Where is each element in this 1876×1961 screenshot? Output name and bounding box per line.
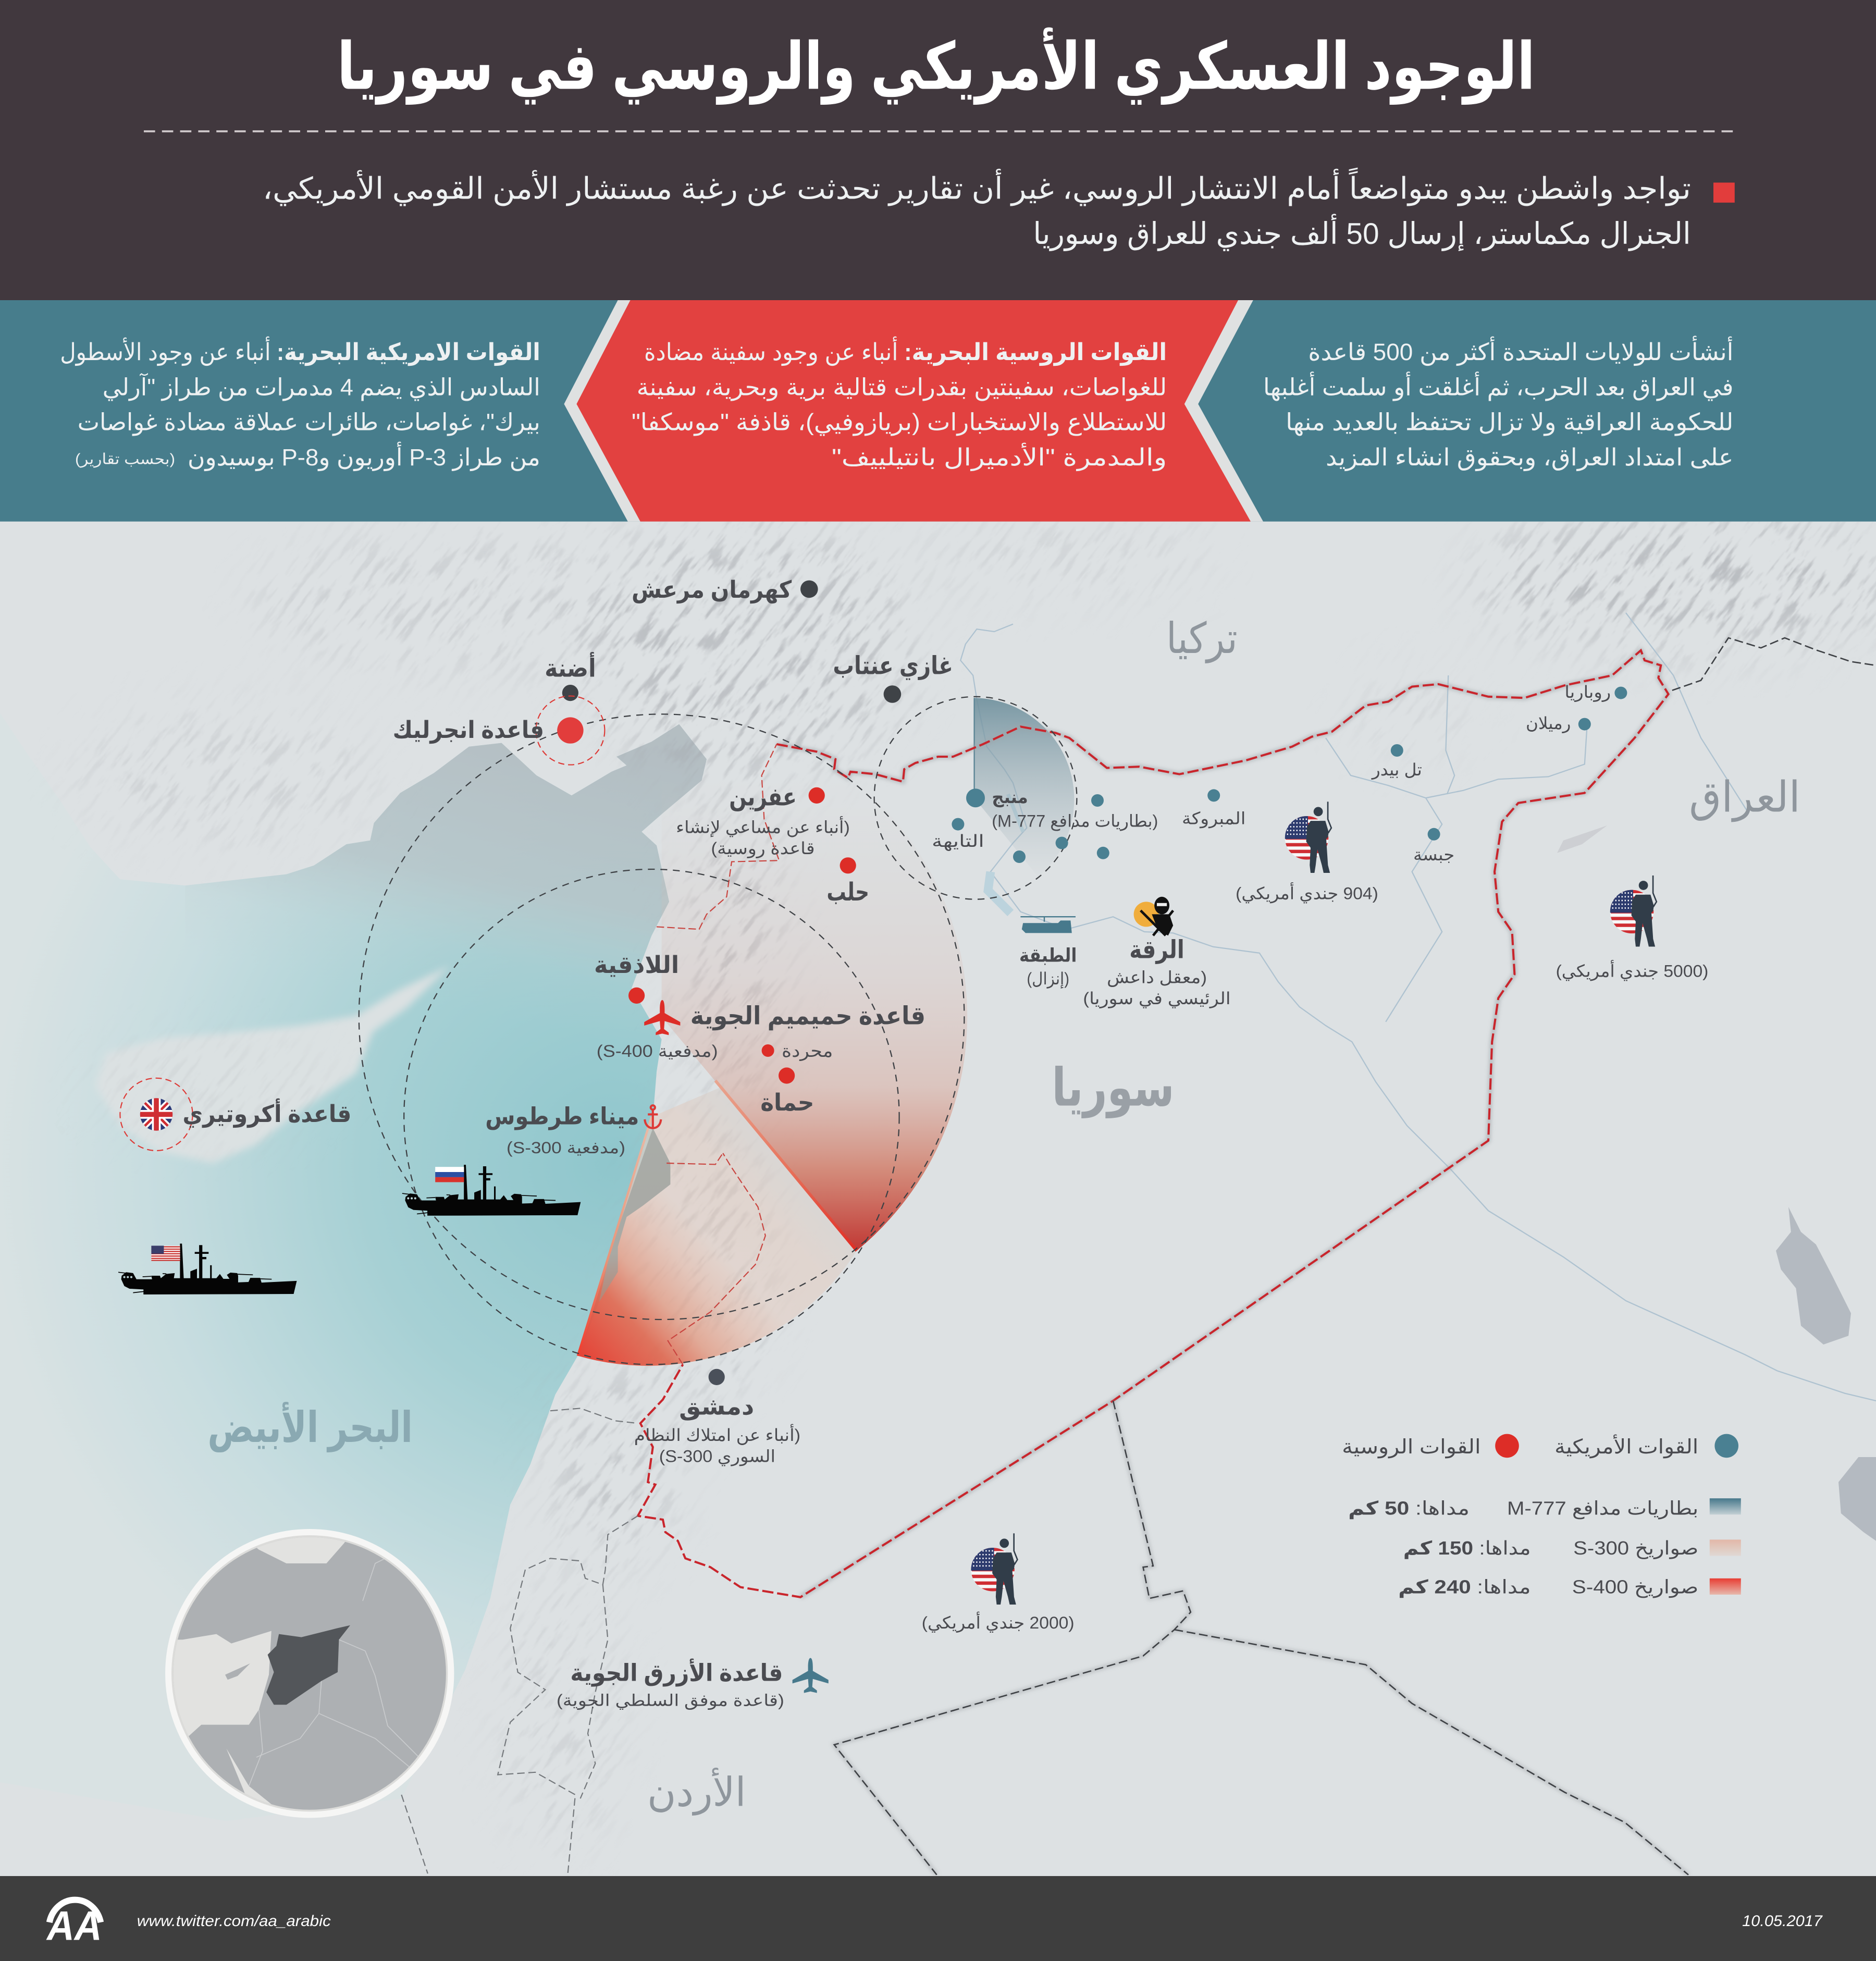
range sector: S-400 [662,714,967,1251]
text: US naval forces: السادس الذي يضم 4 مدمرات من طراز "آرلي [103,373,540,401]
text: US bases in Iraq: في العراق بعد الحرب، ثم أغلقت أو سلمت أغلبها [1263,371,1733,401]
US warship [118,1243,297,1294]
label: Tabqa [1019,945,1077,989]
country labels [207,615,1800,1816]
city: Latakia: اللاذقية [594,952,679,978]
troops: 904: (904 جندي أمريكي) [1236,882,1378,904]
city: Afrin: عفرين [729,784,797,812]
US positions [932,683,1627,864]
bullet square [1713,182,1735,203]
Syria border (red dashed) [638,650,1669,1597]
city: Latakia [594,952,679,1004]
icon: ISIS fighter [1134,897,1173,935]
US positions: روباريا [1564,683,1611,702]
text: Russian naval forces: القوات الروسية البحرية: أنباء عن وجود سفينة مضادة [644,336,1167,366]
port: Tartus [485,1103,661,1157]
legend: صواريخ S-300 [1573,1537,1698,1559]
legend: القوات الروسية [1342,1436,1481,1459]
text: US bases in Iraq [1263,336,1733,472]
country labels: البحر الأبيض [207,1401,413,1452]
neighbouring borders (black dashed) [834,638,1876,1875]
text: Russian naval forces: للاستطلاع والاستخبارات (بريازوفيي)، قاذفة "موسكفا" [632,409,1167,437]
map panel [0,522,1876,1876]
text: Russian naval forces: والمدمرة "الأدميرال بانتيلييف" [832,442,1167,472]
country labels: العراق [1689,774,1800,822]
inset locator map [163,1526,463,1826]
text: US naval forces [60,336,540,472]
city: Gaziantep: غازي عنتاب [833,652,953,681]
city: Afrin [676,784,850,858]
base: Hmeimim [597,1000,925,1060]
label: Tabqa: الطبقة [1019,945,1077,966]
intro paragraph: تواجد واشطن يبدو متواضعاً أمام الانتشار الروسي، غير أن تقارير تحدثت عن رغبة مستشار الأمن القومي الأمريكي، [263,167,1691,207]
country labels: تركيا [1166,615,1238,663]
info band [0,300,1876,522]
city: Aleppo [826,857,869,906]
base: Incirlik [393,696,604,765]
US positions: رميلان [1526,714,1571,733]
logo: AA: AA [46,1902,102,1948]
Syria highlight [266,1625,350,1705]
icon: UK flag [138,1095,175,1133]
city: Adana [545,651,596,701]
city: Aleppo: حلب [826,879,869,906]
base: Azraq: (قاعدة موفق السلطي الجوية) [557,1692,784,1710]
troops: 5000 [1556,875,1708,981]
icon: anchor [645,1105,661,1128]
city: Damascus [634,1369,800,1466]
sea [25,724,707,1695]
text: US bases in Iraq: أنشأت للولايات المتحدة أكثر من 500 قاعدة [1308,336,1733,366]
legend [1342,1434,1741,1598]
label: Raqqa [1083,936,1231,1008]
range circles [359,697,1077,1364]
legend: مداها: 150 كم [1403,1537,1531,1559]
city: Hama: حماة [760,1089,814,1116]
label: Raqqa: الرئيسي في سوريا) [1083,989,1231,1008]
red centre panel [576,300,1251,522]
icon: helicopter [1020,917,1076,933]
town: Mahardah [762,1042,833,1062]
legend: مداها: 50 كم [1348,1497,1470,1519]
base: Hmeimim: (مدفعية S-400) [597,1042,718,1060]
rivers and lakes [960,613,1876,1401]
country labels: سوريا [1052,1059,1175,1119]
text: US bases in Iraq: على امتداد العراق، وبحقوق انشاء المزيد [1326,444,1733,472]
troops: 904 [1236,801,1378,904]
Cyprus [95,966,450,1163]
troops: 5000: (5000 جندي أمريكي) [1556,959,1708,981]
header panel [0,0,1876,300]
city: Kahramanmaras: كهرمان مرعش [632,576,792,603]
port: Tartus: (مدفعية S-300) [507,1139,625,1157]
label: Tabqa: (إنزال) [1027,969,1069,989]
legend: مداها: 240 كم [1398,1576,1531,1598]
text: US naval forces: (بحسب تقارير) [75,451,175,467]
troops: 2000 [922,1533,1075,1633]
city: Adana: أضنة [545,651,596,682]
base: Akrotiri: قاعدة أكروتيري [182,1099,351,1128]
social link: www.twitter.com/aa_arabic [137,1913,331,1930]
legend: القوات الأمريكية [1554,1434,1698,1459]
title: الوجود العسكري الأمريكي والروسي في سوريا [337,27,1535,105]
lakes in Iraq [1776,1207,1876,1541]
city: Afrin: قاعدة روسية) [711,839,815,858]
US positions: منبج [992,788,1028,808]
city: Damascus: (أنباء عن امتلاك النظام [634,1424,800,1445]
range sector: M-777 [974,698,1074,877]
text: Russian naval forces: للغواصات، سفينتين بقدرات قتالية برية وبحرية، سفينة [637,374,1167,401]
US positions: جبسة [1413,845,1454,864]
US positions: المبروكة [1182,809,1245,829]
US positions: (بطاريات مدافع M-777) [992,811,1158,831]
footer [0,1876,1876,1961]
text: US bases in Iraq: للحكومة العراقية ولا تزال تحتفظ بالعديد منها [1286,409,1733,437]
troops: 2000: (2000 جندي أمريكي) [922,1611,1075,1633]
base: Azraq: قاعدة الأزرق الجوية [570,1658,783,1687]
base: Azraq [557,1658,829,1710]
city: Hama [760,1067,814,1116]
base: Incirlik: قاعدة انجرليك [393,717,544,744]
terrain texture [0,522,1876,1876]
US positions: تل بيدر [1371,760,1422,780]
Russian warship [402,1165,581,1216]
legend: بطاريات مدافع M-777 [1507,1497,1698,1519]
city: Damascus: دمشق [679,1393,754,1420]
text: US naval forces: من طراز P-3 أوريون وP-8 بوسيدون [188,441,540,472]
label: Raqqa: (معقل داعش [1107,968,1207,986]
US positions: التايهة [932,832,984,851]
text: US naval forces: القوات الامريكية البحرية: أنباء عن وجود الأسطول [60,336,540,366]
base: Akrotiri [120,1078,351,1151]
port: Tartus: ميناء طرطوس [485,1103,639,1130]
city: Damascus: السوري S-300) [659,1447,775,1466]
intro paragraph [263,167,1691,252]
text: US naval forces: بيرك"، غواصات، طائرات عملاقة مضادة غواصات [78,409,540,437]
base: Hmeimim: قاعدة حميميم الجوية [690,1003,925,1031]
text: Russian naval forces [632,336,1167,472]
label: Raqqa: الرقة [1129,936,1184,964]
city: Afrin: (أنباء عن مساعي لإنشاء [676,816,850,837]
legend: صواريخ S-400 [1572,1576,1698,1598]
range sector: Tartus [578,1087,857,1366]
town: Mahardah: محردة [782,1042,833,1062]
date: 10.05.2017 [1742,1913,1823,1930]
city: Gaziantep [833,652,953,703]
sea part inside the sector [599,1128,670,1302]
intro paragraph: الجنرال مكماستر، إرسال 50 ألف جندي للعراق وسوريا [1033,214,1691,252]
country labels: الأردن [647,1768,746,1816]
chevron dividers [564,300,1263,522]
